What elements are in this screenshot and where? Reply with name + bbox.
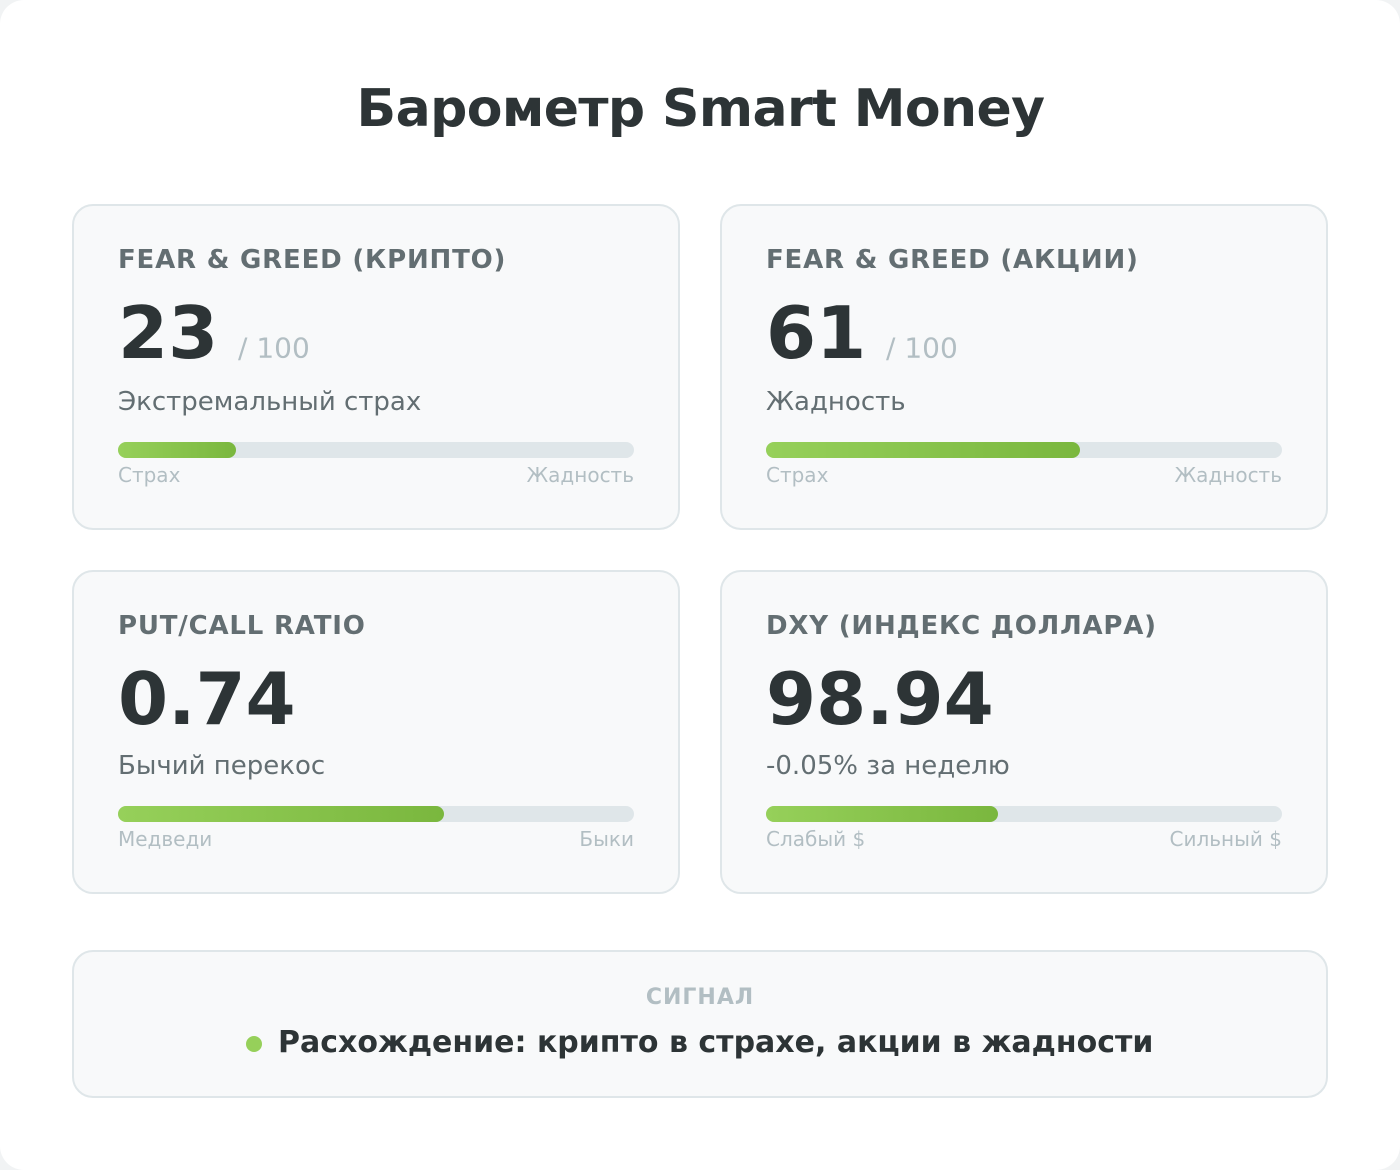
status text: Жадность <box>766 387 906 417</box>
bar right label: Жадность <box>1175 463 1282 487</box>
status text: Экстремальный страх <box>118 387 421 417</box>
progress bar <box>766 806 1282 822</box>
progress bar <box>766 442 1282 458</box>
value: 61 <box>766 291 866 375</box>
panel: fear and greed crypto <box>73 205 679 529</box>
icon: signal dot <box>246 1036 262 1052</box>
title: Барометр Smart Money <box>357 79 1044 139</box>
progress bar <box>118 806 634 822</box>
bar left label: Страх <box>766 463 829 487</box>
value: 0.74 <box>118 657 296 741</box>
panel heading: DXY (ИНДЕКС ДОЛЛАРА) <box>766 611 1157 641</box>
bar right label: Сильный $ <box>1170 827 1282 851</box>
progress bar <box>118 442 634 458</box>
panel heading: FEAR & GREED (КРИПТО) <box>118 245 506 275</box>
value scale: / 100 <box>238 332 310 364</box>
value: 98.94 <box>766 657 994 741</box>
status text: Бычий перекос <box>118 751 325 781</box>
panel: put/call ratio <box>73 571 679 893</box>
panel: signal <box>73 951 1327 1097</box>
status text: -0.05% за неделю <box>766 751 1010 781</box>
panel heading: FEAR & GREED (АКЦИИ) <box>766 245 1139 275</box>
panel: fear and greed stocks <box>721 205 1327 529</box>
panel heading: PUT/CALL RATIO <box>118 611 366 641</box>
panel: dxy <box>721 571 1327 893</box>
bar right label: Быки <box>579 827 634 851</box>
value scale: / 100 <box>886 332 958 364</box>
signal heading: СИГНАЛ <box>646 985 754 1010</box>
signal text: Расхождение: крипто в страхе, акции в жадности <box>278 1025 1153 1060</box>
bar right label: Жадность <box>527 463 634 487</box>
bar left label: Слабый $ <box>766 827 865 851</box>
bar left label: Медведи <box>118 827 212 851</box>
bar left label: Страх <box>118 463 181 487</box>
value: 23 <box>118 291 218 375</box>
